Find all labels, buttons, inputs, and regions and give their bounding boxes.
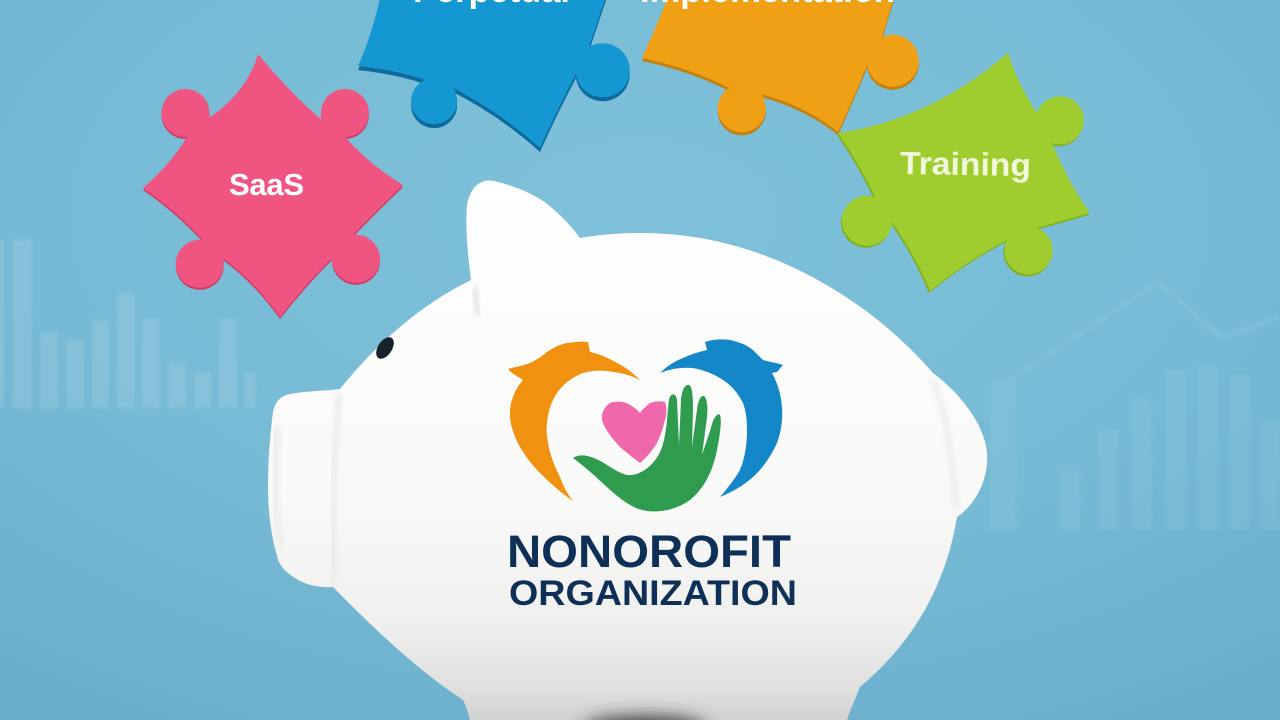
puzzle piece: SaaS xyxy=(143,54,403,319)
piggy bank xyxy=(268,180,987,720)
Implementation piece edge xyxy=(642,0,919,135)
Training piece edge xyxy=(837,55,1089,293)
logo: orange swoosh xyxy=(508,342,640,501)
puzzle piece: Implementation xyxy=(640,0,919,135)
left faded bar chart xyxy=(0,240,256,408)
pig snout crease xyxy=(333,394,340,582)
Perpetual piece face xyxy=(358,0,630,148)
Implementation piece face xyxy=(642,0,919,132)
logo: pink heart xyxy=(602,401,666,463)
pig tail crease xyxy=(932,380,956,510)
pig belly shadow xyxy=(583,717,707,720)
logo: green hand xyxy=(573,385,721,511)
SaaS piece edge xyxy=(143,56,403,319)
logo xyxy=(507,339,797,613)
Perpetual piece edge xyxy=(358,0,630,152)
pig eye xyxy=(373,334,397,362)
Training piece face xyxy=(838,53,1090,291)
pig silhouette xyxy=(268,180,987,720)
puzzle piece: Perpetual xyxy=(358,0,630,152)
logo: blue swoosh xyxy=(660,339,783,497)
puzzle piece: Training xyxy=(837,53,1090,293)
SaaS piece face xyxy=(143,54,403,317)
label: Training: Training xyxy=(900,145,1031,183)
logo: wordmark line two: ORGANIZATION xyxy=(509,574,797,613)
logo: wordmark line one: NONOROFIT xyxy=(507,526,791,577)
right faded chart xyxy=(990,282,1280,530)
pig snout rim shading xyxy=(275,425,282,548)
pig ear crease xyxy=(474,285,479,316)
label: SaaS: SaaS xyxy=(229,167,304,202)
